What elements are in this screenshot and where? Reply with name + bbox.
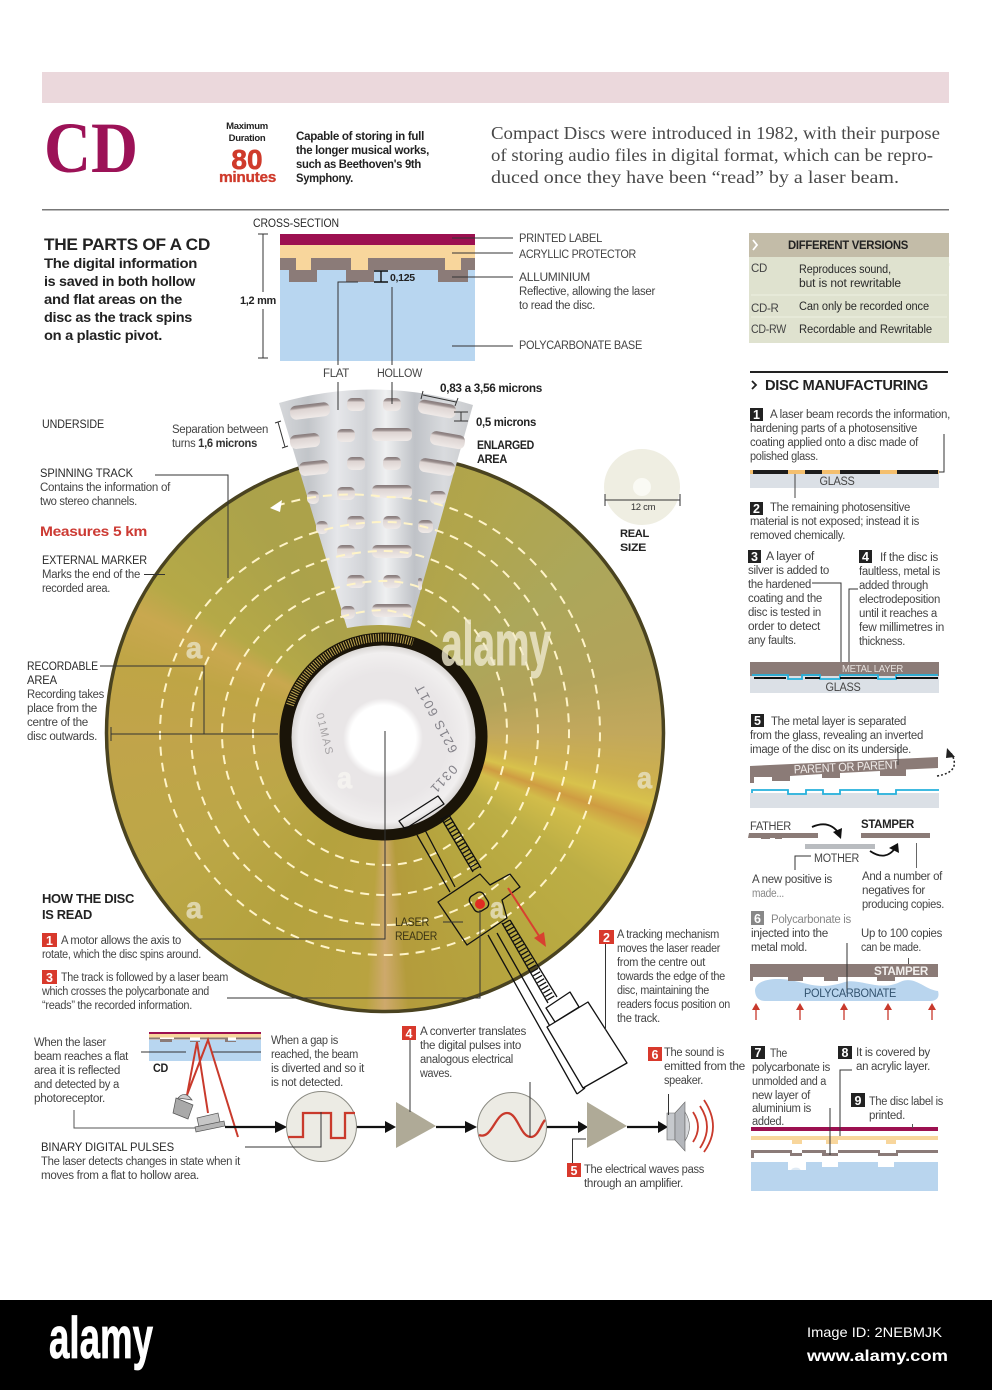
analog wave circle xyxy=(478,1082,546,1162)
step 9: disc label xyxy=(851,1093,944,1122)
step 1: laser records: A laser beam records the information, xyxy=(770,409,950,421)
step 9: disc label: The disc label is xyxy=(869,1096,944,1108)
label: recordable area: Recording takes xyxy=(27,689,105,701)
diagram: metal layer on glass: METAL LAYER xyxy=(842,663,904,675)
step 4: converter: the digital pulses into xyxy=(420,1040,521,1052)
amplifier triangle xyxy=(587,1102,627,1148)
diagram: father mother stamper: A new positive is xyxy=(752,874,833,886)
laser reader mechanism xyxy=(399,796,627,1094)
step 4: converter xyxy=(402,1026,527,1112)
text: binary digital pulses: The laser detects changes in state when it xyxy=(41,1156,241,1168)
text: gap reached: is not detected. xyxy=(271,1077,343,1089)
diagram: glass with coating: GLASS xyxy=(820,476,855,488)
footer bar xyxy=(0,1300,992,1390)
label: external marker: EXTERNAL MARKER xyxy=(42,555,147,567)
step 2: tracking mechanism: towards the edge of the xyxy=(617,971,725,983)
title: CD: CD xyxy=(44,108,138,188)
diagram: cross-section: PRINTED LABEL xyxy=(519,233,603,245)
step 5: amplifier: through an amplifier. xyxy=(584,1178,683,1190)
diagram: parent separated from glass xyxy=(750,747,955,808)
label: external marker xyxy=(42,555,165,595)
step 5: metal separated: The metal layer is separated xyxy=(771,716,906,728)
label: recordable area: centre of the xyxy=(27,717,88,729)
panel: how the disc is read: The track is followed by a laser beam xyxy=(61,972,228,984)
watermark: a xyxy=(337,762,352,795)
step 7: polycarbonate unmolded: 7 xyxy=(755,1046,762,1060)
label: microns measurements: 0,5 microns xyxy=(476,417,536,429)
speaker icon xyxy=(667,1100,713,1152)
text: binary digital pulses xyxy=(41,1142,241,1182)
step 8: acrylic layer: It is covered by xyxy=(856,1047,931,1059)
diagram: father mother stamper: FATHER xyxy=(750,821,791,833)
step 4: electrodeposition xyxy=(849,550,944,662)
intro paragraph xyxy=(491,123,940,187)
step 7: polycarbonate unmolded: The xyxy=(770,1048,787,1060)
diagram: father mother stamper: made... xyxy=(752,888,784,900)
diagram: stamper and polycarbonate: STAMPER xyxy=(874,966,929,978)
panel: different versions: Recordable and Rewritable xyxy=(799,324,932,336)
real size disc: REAL xyxy=(620,528,650,540)
label: recordable area: RECORDABLE xyxy=(27,661,98,673)
step 4: electrodeposition: until it reaches a xyxy=(859,608,938,620)
intro paragraph: duced once they have been “read” by a laser beam. xyxy=(491,167,899,187)
text: storing capacity: Symphony. xyxy=(296,173,353,185)
small CD section with laser: CD xyxy=(153,1063,168,1075)
step 4: converter: 4 xyxy=(406,1027,413,1041)
step 9: disc label: printed. xyxy=(869,1110,905,1122)
converter triangle xyxy=(396,1102,436,1148)
step 3: silver layer: coating and the xyxy=(748,593,822,605)
label: microns measurements: AREA xyxy=(477,454,507,466)
text: binary digital pulses: BINARY DIGITAL PULSES xyxy=(41,1142,174,1154)
panel: different versions: DIFFERENT VERSIONS xyxy=(788,240,909,252)
step 2: removed chemically: removed chemically. xyxy=(750,530,845,542)
heading: the parts of a CD: THE PARTS OF A CD xyxy=(44,235,210,254)
step 2: tracking mechanism: from the centre out xyxy=(617,957,706,969)
step 3: silver layer: disc is tested in xyxy=(748,607,821,619)
watermark: a xyxy=(934,240,949,273)
diagram: cross-section: ACRYLLIC PROTECTOR xyxy=(519,249,636,261)
step 5: metal separated: image of the disc on its underside. xyxy=(750,744,911,756)
image: gold compact disc surface xyxy=(105,453,665,1013)
text: storing capacity: the longer musical works, xyxy=(296,145,429,157)
step 4: converter: waves. xyxy=(419,1068,452,1080)
text: gap reached: is diverted and so it xyxy=(271,1063,365,1075)
real size disc xyxy=(604,449,680,554)
step 4: electrodeposition: few millimetres in xyxy=(859,622,944,634)
step 4: electrodeposition: faultless, metal is xyxy=(859,566,941,578)
step 7: polycarbonate unmolded: unmolded and a xyxy=(752,1076,827,1088)
step 1: laser records: polished glass. xyxy=(750,451,818,463)
step 3: silver layer: the hardened xyxy=(748,579,811,591)
header band xyxy=(42,72,949,103)
step 6: speaker: 6 xyxy=(652,1048,659,1062)
diagram: cross-section: to read the disc. xyxy=(519,300,595,312)
label: recordable area: AREA xyxy=(27,675,57,687)
step 5: amplifier: 5 xyxy=(571,1164,578,1178)
panel: different versions: Can only be recorded once xyxy=(799,301,929,313)
text: laser beam reflected: and detected by a xyxy=(34,1079,120,1091)
diagram: stamper and polycarbonate xyxy=(750,943,939,1020)
label: spinning track: Measures 5 km xyxy=(40,523,147,539)
step 5: metal separated xyxy=(750,714,923,756)
heading: the parts of a CD xyxy=(44,235,210,343)
step 5: metal separated: from the glass, revealing an inverted xyxy=(750,730,923,742)
step 2: tracking mechanism: disc, maintaining the xyxy=(617,985,709,997)
step 4: electrodeposition: added through xyxy=(859,580,928,592)
diagram: father mother stamper: producing copies. xyxy=(862,899,944,911)
disc rim xyxy=(106,454,664,1012)
heading: disc manufacturing: DISC MANUFACTURING xyxy=(765,378,928,394)
step 5: amplifier: The electrical waves pass xyxy=(584,1164,705,1176)
watermark: a xyxy=(790,1162,803,1184)
step 3: silver layer: silver is added to xyxy=(748,565,829,577)
step 2: tracking mechanism: moves the laser reader xyxy=(617,943,720,955)
diagram: finished disc layers xyxy=(751,1070,938,1191)
signal chain arrows xyxy=(225,1121,668,1133)
diagram: parent separated from glass: PARENT OR PARENT xyxy=(794,757,900,777)
small CD section with laser xyxy=(141,1032,261,1137)
heading: the parts of a CD: The digital information xyxy=(44,255,197,271)
panel: how the disc is read: 3 xyxy=(46,971,53,985)
watermark: a xyxy=(490,892,504,925)
step 6: polycarbonate injection: metal mold. xyxy=(751,942,807,954)
diagram: glass with coating xyxy=(750,470,939,498)
diagram: cross-section: FLAT xyxy=(323,368,349,380)
diagram: cross-section: POLYCARBONATE BASE xyxy=(519,340,643,352)
step 1: laser records: hardening parts of a photosensitive xyxy=(750,423,917,435)
heading: disc manufacturing xyxy=(750,371,948,394)
step 2: tracking mechanism: the track. xyxy=(617,1013,660,1025)
step 4: converter: analogous electrical xyxy=(420,1054,513,1066)
step 4: electrodeposition: If the disc is xyxy=(880,552,939,564)
intro paragraph: of storing audio files in digital format, which can be repro- xyxy=(491,145,933,165)
label: laser reader: LASER xyxy=(395,917,429,929)
panel: different versions: Reproduces sound, xyxy=(799,264,891,276)
real size disc: SIZE xyxy=(620,542,646,554)
step 4: electrodeposition: 4 xyxy=(862,550,869,564)
label: microns measurements: turns 1,6 microns xyxy=(172,438,257,450)
step 7: polycarbonate unmolded: aluminium is xyxy=(752,1103,812,1115)
text: storing capacity: Capable of storing in full xyxy=(296,131,424,143)
step 3: silver layer: any faults. xyxy=(748,635,796,647)
fan: enlarged area of the track xyxy=(275,382,473,628)
real size disc: 12 cm xyxy=(631,502,656,513)
label: underside: UNDERSIDE xyxy=(42,419,104,431)
step 2: removed chemically: The remaining photosensitive xyxy=(770,502,910,514)
step 6: polycarbonate injection xyxy=(751,911,943,954)
text: laser beam reflected: photoreceptor. xyxy=(34,1093,105,1105)
step 6: speaker: speaker. xyxy=(664,1075,703,1087)
diagram: cross-section: 1,2 mm xyxy=(240,295,277,307)
step 4: converter: A converter translates xyxy=(420,1026,527,1038)
watermark: alamy xyxy=(441,610,551,679)
panel: how the disc is read: rotate, which the disc spins around. xyxy=(42,949,201,961)
panel: how the disc is read: HOW THE DISC xyxy=(42,892,134,906)
diagram: cross-section: ALLUMINIUM xyxy=(519,272,590,284)
step 6: polycarbonate injection: can be made. xyxy=(861,942,921,954)
step 9: disc label: 9 xyxy=(855,1094,862,1108)
label: recordable area: place from the xyxy=(27,703,97,715)
label: spinning track: SPINNING TRACK xyxy=(40,468,133,480)
label: laser reader xyxy=(395,917,463,943)
step 2: tracking mechanism: readers focus position on xyxy=(617,999,730,1011)
panel: different versions: CD xyxy=(751,263,767,275)
disc hub: 01MAS xyxy=(313,712,335,757)
panel: how the disc is read xyxy=(41,892,228,1012)
step 1: laser records: 1 xyxy=(753,408,760,422)
heading: the parts of a CD: is saved in both hollow xyxy=(44,273,195,289)
step 1: laser records xyxy=(750,408,950,472)
heading: the parts of a CD: and flat areas on the xyxy=(44,291,183,307)
step 6: polycarbonate injection: injected into the xyxy=(751,928,828,940)
label: microns measurements xyxy=(172,383,542,466)
step 3: silver layer: order to detect xyxy=(748,621,821,633)
diagram: father mother stamper: MOTHER xyxy=(814,853,859,865)
step 2: tracking mechanism: A tracking mechanism xyxy=(617,929,719,941)
panel: different versions: but is not rewritable xyxy=(799,278,901,290)
step 5: metal separated: 5 xyxy=(754,714,761,728)
text: laser beam reflected xyxy=(34,1037,196,1128)
label: laser reader: READER xyxy=(395,931,437,943)
watermark: a xyxy=(637,762,652,795)
watermark: a xyxy=(186,892,202,925)
text: laser beam reflected: When the laser xyxy=(34,1037,106,1049)
label: microns measurements: 0,83 a 3,56 microns xyxy=(440,383,542,395)
step 7: polycarbonate unmolded: polycarbonate is xyxy=(752,1062,831,1074)
stat: maximum duration 80 minutes: Maximum xyxy=(226,121,268,132)
step 6: speaker: The sound is xyxy=(664,1047,725,1059)
step 8: acrylic layer xyxy=(838,1046,931,1073)
heading: the parts of a CD: disc as the track spins xyxy=(44,309,193,325)
heading: the parts of a CD: on a plastic pivot. xyxy=(44,327,162,343)
diagram: cross-section: HOLLOW xyxy=(377,368,422,380)
label: spinning track: Contains the information of xyxy=(40,482,171,494)
panel: different versions xyxy=(749,233,949,343)
panel: how the disc is read: “reads” the recorded information. xyxy=(42,1000,192,1012)
step 4: electrodeposition: electrodeposition xyxy=(859,594,940,606)
step 3: silver layer: 3 xyxy=(751,550,758,564)
step 6: speaker: emitted from the xyxy=(664,1061,745,1073)
diagram: cross-section xyxy=(240,218,655,380)
diagram: cross-section: 0,125 xyxy=(390,272,415,284)
diagram: father mother stamper xyxy=(748,819,944,911)
stat: maximum duration 80 minutes: Duration xyxy=(229,133,266,144)
stat: maximum duration 80 minutes: minutes xyxy=(219,170,276,186)
step 2: removed chemically xyxy=(750,502,920,542)
label: microns measurements: Separation between xyxy=(172,424,268,436)
label: microns measurements: ENLARGED xyxy=(477,440,534,452)
text: gap reached: When a gap is xyxy=(271,1035,339,1047)
footer bar: Image ID: 2NEBMJK xyxy=(807,1324,943,1340)
diagram: father mother stamper: negatives for xyxy=(862,885,925,897)
watermark: a xyxy=(186,632,202,665)
label: external marker: recorded area. xyxy=(42,583,110,595)
step 8: acrylic layer: an acrylic layer. xyxy=(856,1061,930,1073)
label: recordable area: disc outwards. xyxy=(27,731,97,743)
text: laser beam reflected: area it is reflected xyxy=(34,1065,120,1077)
text: storing capacity xyxy=(296,131,429,185)
step 7: polycarbonate unmolded: added. xyxy=(752,1116,784,1128)
disc hub: 0311 xyxy=(427,762,461,797)
step 2: tracking mechanism xyxy=(599,929,730,1030)
watermark xyxy=(186,240,949,1184)
panel: how the disc is read: 1 xyxy=(46,934,53,948)
diagram: cross-section: CROSS-SECTION xyxy=(253,218,339,230)
step 6: polycarbonate injection: Polycarbonate is xyxy=(771,914,852,926)
diagram: metal layer on glass xyxy=(750,662,939,694)
text: laser beam reflected: beam reaches a flat xyxy=(34,1051,129,1063)
text: gap reached xyxy=(271,1035,365,1089)
text: storing capacity: such as Beethoven's 9th xyxy=(296,159,421,171)
disc hub xyxy=(280,632,488,840)
step 7: polycarbonate unmolded: new layer of xyxy=(752,1090,811,1102)
label: spinning track xyxy=(40,468,228,578)
panel: how the disc is read: IS READ xyxy=(42,908,92,922)
footer bar: alamy xyxy=(49,1306,153,1371)
step 6: speaker xyxy=(648,1047,745,1115)
step 3: silver layer xyxy=(748,550,841,665)
diagram: cross-section: Reflective, allowing the laser xyxy=(519,286,655,298)
leader lines to disc xyxy=(100,666,480,998)
step 3: silver layer: A layer of xyxy=(766,551,815,563)
step 2: removed chemically: material is not exposed; instead it is xyxy=(750,516,920,528)
panel: how the disc is read: which crosses the polycarbonate and xyxy=(41,986,209,998)
step 2: removed chemically: 2 xyxy=(753,502,760,516)
step 4: electrodeposition: thickness. xyxy=(859,636,905,648)
step 6: polycarbonate injection: 6 xyxy=(754,912,761,926)
spiral track xyxy=(160,495,600,955)
footer bar: www.alamy.com xyxy=(806,1348,948,1365)
diagram: stamper and polycarbonate: POLYCARBONATE xyxy=(804,988,897,1000)
intro paragraph: Compact Discs were introduced in 1982, with their purpose xyxy=(491,123,940,143)
step 1: laser records: coating applied onto a disc made of xyxy=(750,437,919,449)
diagram: metal layer on glass: GLASS xyxy=(826,682,861,694)
stat: maximum duration 80 minutes: 80 xyxy=(231,144,263,175)
text: binary digital pulses: moves from a flat to hollow area. xyxy=(41,1170,199,1182)
panel: different versions: CD-RW xyxy=(751,324,786,336)
stat: maximum duration 80 minutes xyxy=(219,121,276,186)
red laser dot and direction arrow xyxy=(475,888,546,947)
label: recordable area xyxy=(27,661,105,743)
diagram: father mother stamper: STAMPER xyxy=(861,819,915,831)
label: spinning track: two stereo channels. xyxy=(40,496,137,508)
panel: how the disc is read: A motor allows the axis to xyxy=(61,935,181,947)
step 6: polycarbonate injection: Up to 100 copies xyxy=(861,928,943,940)
diagram: father mother stamper: And a number of xyxy=(862,871,943,883)
step 2: tracking mechanism: 2 xyxy=(603,931,610,945)
digital pulse circle xyxy=(245,1092,356,1162)
step 5: amplifier xyxy=(567,1139,705,1190)
label: external marker: Marks the end of the xyxy=(42,569,140,581)
disc hub: 621S 601T xyxy=(411,681,461,756)
text: gap reached: reached, the beam xyxy=(271,1049,358,1061)
step 7: polycarbonate unmolded xyxy=(751,1046,831,1128)
panel: different versions: CD-R xyxy=(751,303,779,315)
step 8: acrylic layer: 8 xyxy=(842,1046,849,1060)
